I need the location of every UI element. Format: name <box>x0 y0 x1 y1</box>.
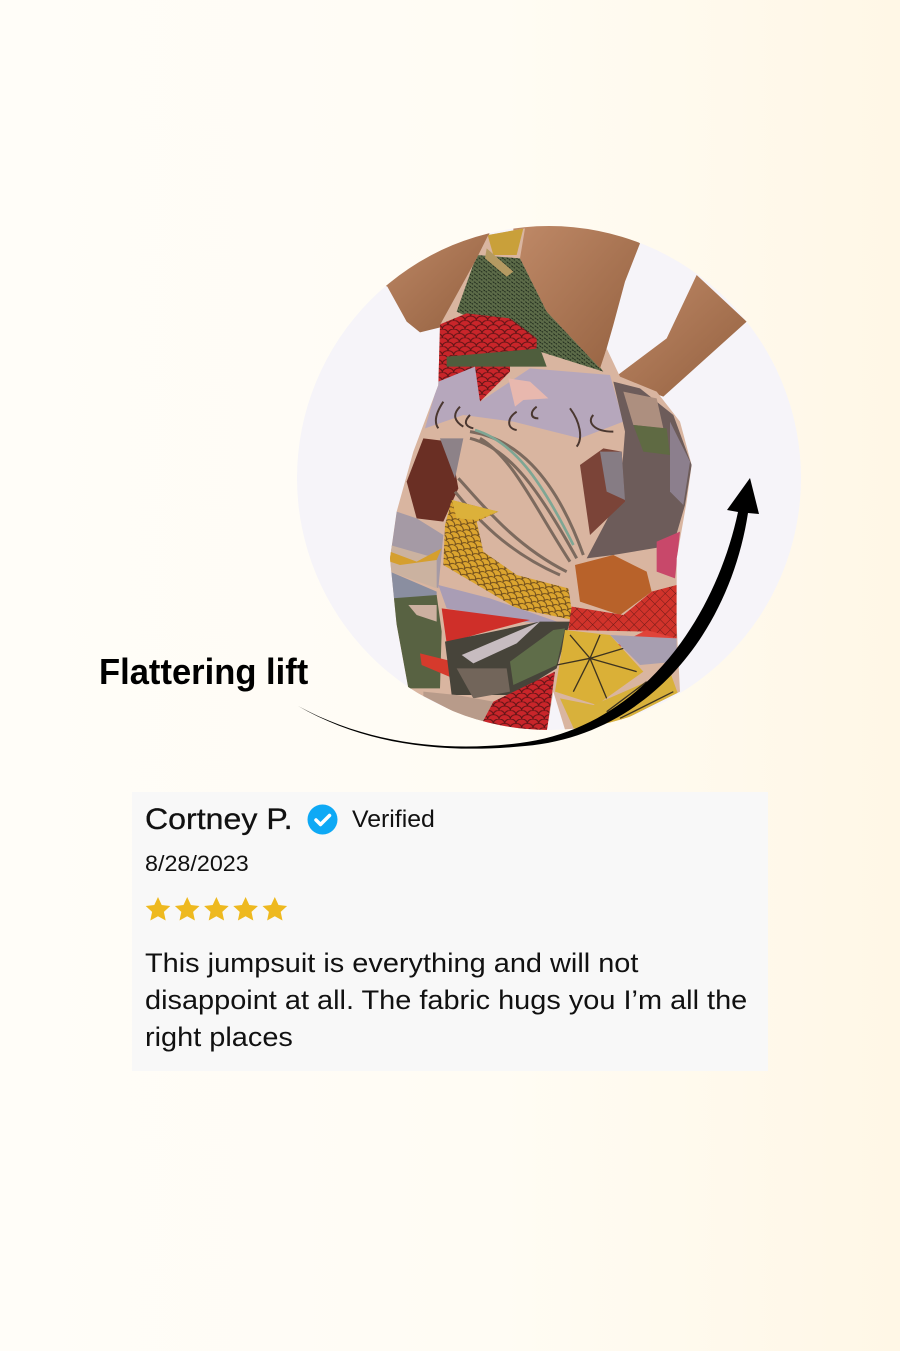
review text: disappoint at all. The fabric hugs you I’m all the <box>145 985 747 1015</box>
panel: review card <box>132 792 768 1071</box>
heading: Flattering lift: Flattering lift <box>99 651 308 692</box>
product photo illustration <box>297 226 801 749</box>
model figure <box>377 222 747 735</box>
arrow: curved lift arrow <box>298 478 759 749</box>
reviewer name: Cortney P. <box>145 803 293 836</box>
star rating <box>146 897 287 920</box>
review text: right places <box>145 1022 293 1052</box>
review text <box>145 948 747 1052</box>
icon: verified badge <box>308 804 338 834</box>
verified label: Verified <box>352 806 435 833</box>
review date: 8/28/2023 <box>145 851 249 876</box>
review text: This jumpsuit is everything and will not <box>145 948 638 978</box>
patterned jumpsuit <box>380 225 700 735</box>
circle backdrop <box>297 226 801 730</box>
skin <box>377 222 747 397</box>
